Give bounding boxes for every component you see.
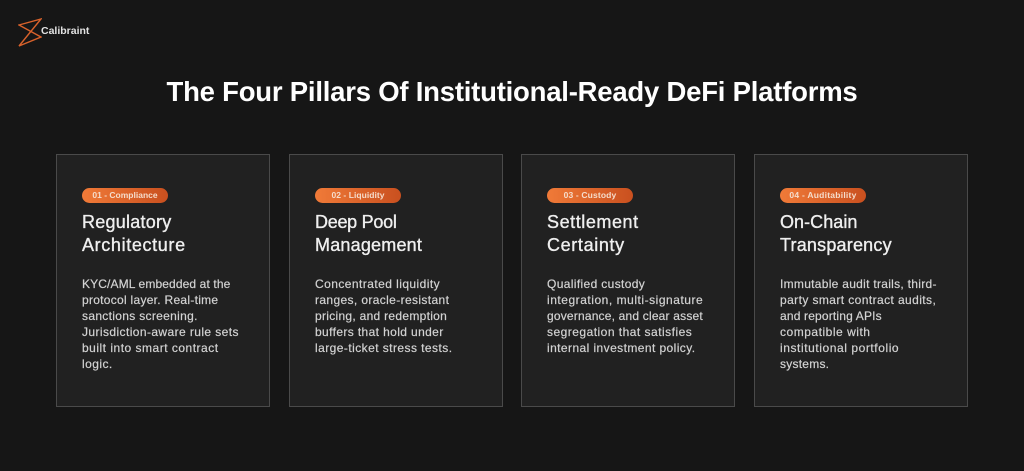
- tag: 03 - Custody: [564, 190, 616, 200]
- tag: [780, 188, 866, 203]
- panel: compliance: [56, 154, 270, 407]
- description: governance, and clear asset: [547, 309, 703, 323]
- description: [547, 277, 703, 355]
- description: segregation that satisfies: [547, 325, 692, 339]
- description: Concentrated liquidity: [315, 277, 440, 291]
- heading: [547, 212, 639, 256]
- description: [82, 277, 239, 371]
- description: systems.: [780, 357, 829, 371]
- description: ranges, oracle-resistant: [315, 293, 449, 307]
- heading: [780, 212, 892, 256]
- heading: Deep Pool: [315, 212, 397, 232]
- description: logic.: [82, 357, 113, 371]
- logo: [18, 18, 90, 47]
- description: [315, 277, 452, 355]
- description: and reporting APIs: [780, 309, 882, 323]
- description: protocol layer. Real-time: [82, 293, 218, 307]
- heading: Transparency: [780, 235, 892, 255]
- description: institutional portfolio: [780, 341, 899, 355]
- heading: Settlement: [547, 212, 639, 232]
- description: Jurisdiction-aware rule sets: [82, 325, 239, 339]
- brand name: Calibraint: [41, 25, 89, 37]
- heading: [82, 212, 186, 255]
- heading: On-Chain: [780, 212, 857, 232]
- description: compatible with: [780, 325, 871, 339]
- description: pricing, and redemption: [315, 309, 447, 323]
- description: sanctions screening.: [82, 309, 198, 323]
- tag: [82, 188, 168, 203]
- tag: 01 - Compliance: [92, 190, 158, 200]
- description: buffers that hold under: [315, 325, 444, 339]
- panel: auditability: [754, 154, 968, 407]
- description: Qualified custody: [547, 277, 645, 291]
- description: KYC/AML embedded at the: [82, 277, 230, 291]
- tag: 02 - Liquidity: [331, 190, 385, 200]
- description: large-ticket stress tests.: [315, 341, 452, 355]
- panel: liquidity: [289, 154, 503, 407]
- description: integration, multi-signature: [547, 293, 703, 307]
- panel: custody: [521, 154, 735, 407]
- heading: Regulatory: [82, 212, 172, 232]
- description: internal investment policy.: [547, 341, 696, 355]
- tag: [547, 188, 633, 203]
- description: party smart contract audits,: [780, 293, 936, 307]
- title: The Four Pillars Of Institutional-Ready DeFi Platforms: [166, 76, 858, 107]
- heading: Management: [315, 235, 422, 255]
- description: Immutable audit trails, third-: [780, 277, 937, 291]
- heading: Certainty: [547, 235, 625, 255]
- heading: [315, 212, 422, 256]
- description: [780, 277, 937, 371]
- tag: [315, 188, 401, 203]
- description: built into smart contract: [82, 341, 219, 355]
- heading: Architecture: [82, 235, 186, 255]
- icon: logo mark: [18, 18, 42, 47]
- tag: 04 - Auditability: [789, 190, 857, 200]
